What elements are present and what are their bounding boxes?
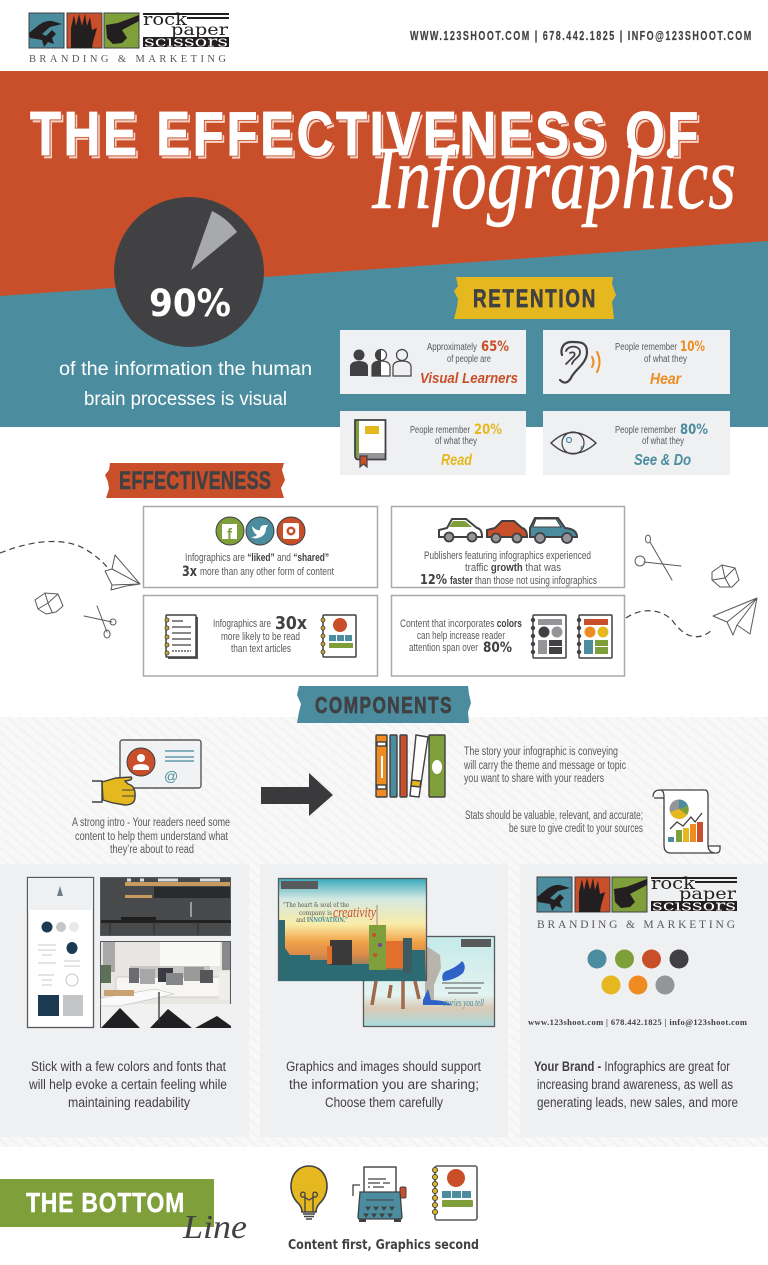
intro text: they’re about to read bbox=[110, 844, 194, 856]
visual statistic text: brain processes is visual bbox=[84, 389, 287, 410]
icon: infographic notebook bbox=[432, 1166, 477, 1220]
panel: liked and shared: more than any other form of content bbox=[200, 566, 334, 578]
panel: hear: 10% bbox=[680, 339, 705, 355]
panel: hear: People remember bbox=[615, 342, 678, 353]
panel: 30x more likely: Infographics are bbox=[213, 618, 271, 630]
intro text: content to help them understand what bbox=[75, 831, 229, 843]
brand logo: rock bbox=[651, 874, 696, 894]
panel: visual learners bbox=[340, 330, 526, 394]
panel: visual learners: Visual Learners bbox=[420, 370, 518, 387]
hero background teal bbox=[0, 241, 768, 427]
panel: 30x more likely: 30x bbox=[275, 613, 307, 634]
image: feet social graphic bbox=[364, 936, 494, 1026]
panel: graphics and images: the information you are sharing; bbox=[289, 1077, 479, 1092]
panel: liked and shared: 3x bbox=[182, 564, 197, 580]
brand colour swatches bbox=[588, 950, 688, 994]
banner: the bottom line: THE BOTTOM bbox=[26, 1188, 184, 1219]
icon: hand holding contact card: @ bbox=[164, 768, 178, 784]
panel: your brand: generating leads, new sales, and more bbox=[537, 1095, 738, 1110]
brand logo: BRANDING & MARKETING bbox=[537, 919, 735, 931]
panel: traffic growth: 12% bbox=[420, 573, 447, 588]
panel: colors attention: can help increase reader bbox=[417, 630, 505, 642]
story text: will carry the theme and message or topic bbox=[463, 760, 626, 772]
intro text bbox=[72, 817, 230, 856]
panel: see and do bbox=[543, 411, 730, 475]
icon: notebook text bbox=[165, 615, 198, 659]
header logo: scissors bbox=[144, 32, 228, 50]
image: city social graphic bbox=[278, 878, 426, 981]
panel: read: Read bbox=[441, 452, 473, 469]
heading: effectiveness: EFFECTIVENESS bbox=[119, 466, 271, 495]
icon: social media: f bbox=[227, 526, 233, 543]
panel: see and do: See & Do bbox=[634, 452, 691, 469]
panel: liked and shared: Infographics are “liked” and “shared” bbox=[185, 552, 329, 564]
title: THE EFFECTIVENESS OF bbox=[30, 100, 698, 169]
panel: colors and fonts: maintaining readability bbox=[68, 1095, 190, 1110]
story text bbox=[463, 746, 626, 785]
panel: 30x more likely bbox=[144, 596, 378, 676]
pie chart 90 percent bbox=[114, 197, 264, 347]
icon: scroll with charts bbox=[653, 790, 720, 853]
header logo: rock bbox=[143, 10, 188, 30]
stats text: be sure to give credit to your sources bbox=[509, 823, 643, 835]
heading: retention: RETENTION bbox=[473, 284, 595, 313]
image: city social graphic: “The heart & soul of the bbox=[283, 901, 349, 909]
image: feet social graphic: stories you tell bbox=[443, 998, 484, 1009]
banner: the bottom line bbox=[0, 1179, 247, 1246]
visual statistic text bbox=[59, 359, 312, 410]
scissors right bbox=[635, 535, 681, 580]
image: city social graphic: company is bbox=[299, 909, 332, 917]
image: living room bbox=[100, 942, 231, 1028]
panel: hear bbox=[543, 330, 730, 394]
header contact line: WWW.123SHOOT.COM | 678.442.1825 | INFO@123SHOOT.COM bbox=[410, 30, 751, 43]
panel: colors and fonts: Stick with a few colors and fonts that bbox=[31, 1059, 226, 1074]
heading: effectiveness bbox=[105, 463, 285, 498]
icon: book bbox=[355, 420, 386, 467]
panel: see and do: People remember bbox=[615, 425, 677, 436]
heading: components: COMPONENTS bbox=[315, 694, 452, 719]
icon: typewriter bbox=[353, 1167, 406, 1222]
panel: graphics and images: Choose them carefully bbox=[325, 1095, 443, 1110]
icon: light bulb bbox=[291, 1166, 327, 1219]
panel: 30x more likely: more likely to be read bbox=[221, 631, 300, 643]
components textured background bbox=[0, 717, 768, 1147]
icon: eye bbox=[551, 432, 596, 454]
icon: social media bbox=[216, 517, 305, 545]
header logo: paper bbox=[171, 20, 228, 39]
image: city social graphic: and INNOVATION.” bbox=[296, 917, 348, 924]
icon: ear bbox=[560, 342, 600, 383]
panel: read: 20% bbox=[474, 422, 502, 438]
paper plane right with dashed path bbox=[626, 598, 757, 637]
crumpled paper right bbox=[712, 565, 739, 587]
story text: The story your infographic is conveying bbox=[464, 746, 618, 758]
scissors left bbox=[84, 606, 116, 638]
panel: 30x more likely: than text articles bbox=[231, 643, 291, 655]
image: dark kitchen bbox=[100, 878, 231, 936]
intro text: A strong intro - Your readers need some bbox=[72, 817, 230, 829]
panel: colors attention: 80% bbox=[483, 640, 512, 656]
panel: liked and shared bbox=[144, 506, 378, 588]
panel: your brand bbox=[520, 864, 768, 1137]
icon: arrow bbox=[261, 773, 333, 816]
icon: colored layout bbox=[577, 615, 612, 658]
visual statistic text: of the information the human bbox=[59, 359, 312, 380]
icon: grey layout bbox=[531, 615, 566, 658]
paper plane left with dashed path bbox=[0, 541, 140, 590]
panel: traffic growth: Publishers featuring infographics experienced bbox=[424, 550, 591, 562]
panel: visual learners: 65% bbox=[481, 339, 509, 355]
panel: hear: of what they bbox=[644, 354, 687, 365]
image: city social graphic: creativity bbox=[333, 905, 376, 921]
panel: visual learners: of people are bbox=[447, 354, 491, 365]
panel: read bbox=[340, 411, 526, 475]
panel: traffic growth: faster than those not using infographics bbox=[450, 575, 597, 587]
heading: retention bbox=[454, 277, 616, 319]
icon: infographic notebook bbox=[321, 615, 356, 657]
brand logo bbox=[537, 874, 737, 931]
crumpled paper left bbox=[35, 593, 63, 614]
hero background orange bbox=[0, 71, 768, 331]
panel: colors and fonts: will help evoke a certain feeling while bbox=[28, 1077, 227, 1092]
panel: see and do: 80% bbox=[680, 422, 708, 438]
banner: the bottom line: Line bbox=[182, 1209, 247, 1246]
brand logo: paper bbox=[679, 884, 736, 903]
closing statement: Content first, Graphics second bbox=[288, 1237, 479, 1253]
brand logo: scissors bbox=[652, 896, 736, 914]
panel: graphics and images: Graphics and images should support bbox=[286, 1059, 481, 1074]
stats text: Stats should be valuable, relevant, and accurate; bbox=[465, 810, 643, 822]
icon: cars bbox=[439, 518, 577, 543]
panel: your brand: Your Brand - Infographics are great for bbox=[534, 1059, 730, 1074]
header logo bbox=[29, 10, 229, 65]
icon: hand holding contact card bbox=[92, 740, 201, 805]
panel: graphics and images bbox=[260, 864, 508, 1137]
panel: colors attention bbox=[392, 596, 624, 676]
panel: hear: Hear bbox=[650, 371, 682, 388]
panel: traffic growth bbox=[392, 506, 624, 588]
panel: read: People remember bbox=[410, 425, 471, 436]
panel: visual learners: Approximately bbox=[427, 342, 477, 353]
panel: see and do: of what they bbox=[642, 436, 684, 447]
icon: people bbox=[350, 350, 411, 376]
panel: colors attention: attention span over bbox=[409, 642, 478, 654]
panel: your brand: increasing brand awareness, as well as bbox=[537, 1077, 733, 1092]
panel: colors and fonts bbox=[0, 864, 249, 1137]
story text: you want to share with your readers bbox=[464, 773, 604, 785]
panel: your brand: www.123shoot.com | 678.442.1825 | info@123shoot.com bbox=[528, 1017, 747, 1027]
stats text bbox=[465, 810, 643, 835]
panel: read: of what they bbox=[435, 436, 477, 447]
image: brand mood board bbox=[28, 878, 94, 1028]
panel: traffic growth: traffic growth that was bbox=[465, 562, 561, 574]
icon: books bbox=[376, 735, 445, 797]
panel: colors attention: Content that incorporates colors bbox=[400, 618, 522, 630]
header logo: BRANDING & MARKETING bbox=[29, 54, 226, 65]
heading: components bbox=[297, 686, 471, 723]
pie chart 90 percent: 90% bbox=[149, 282, 231, 325]
